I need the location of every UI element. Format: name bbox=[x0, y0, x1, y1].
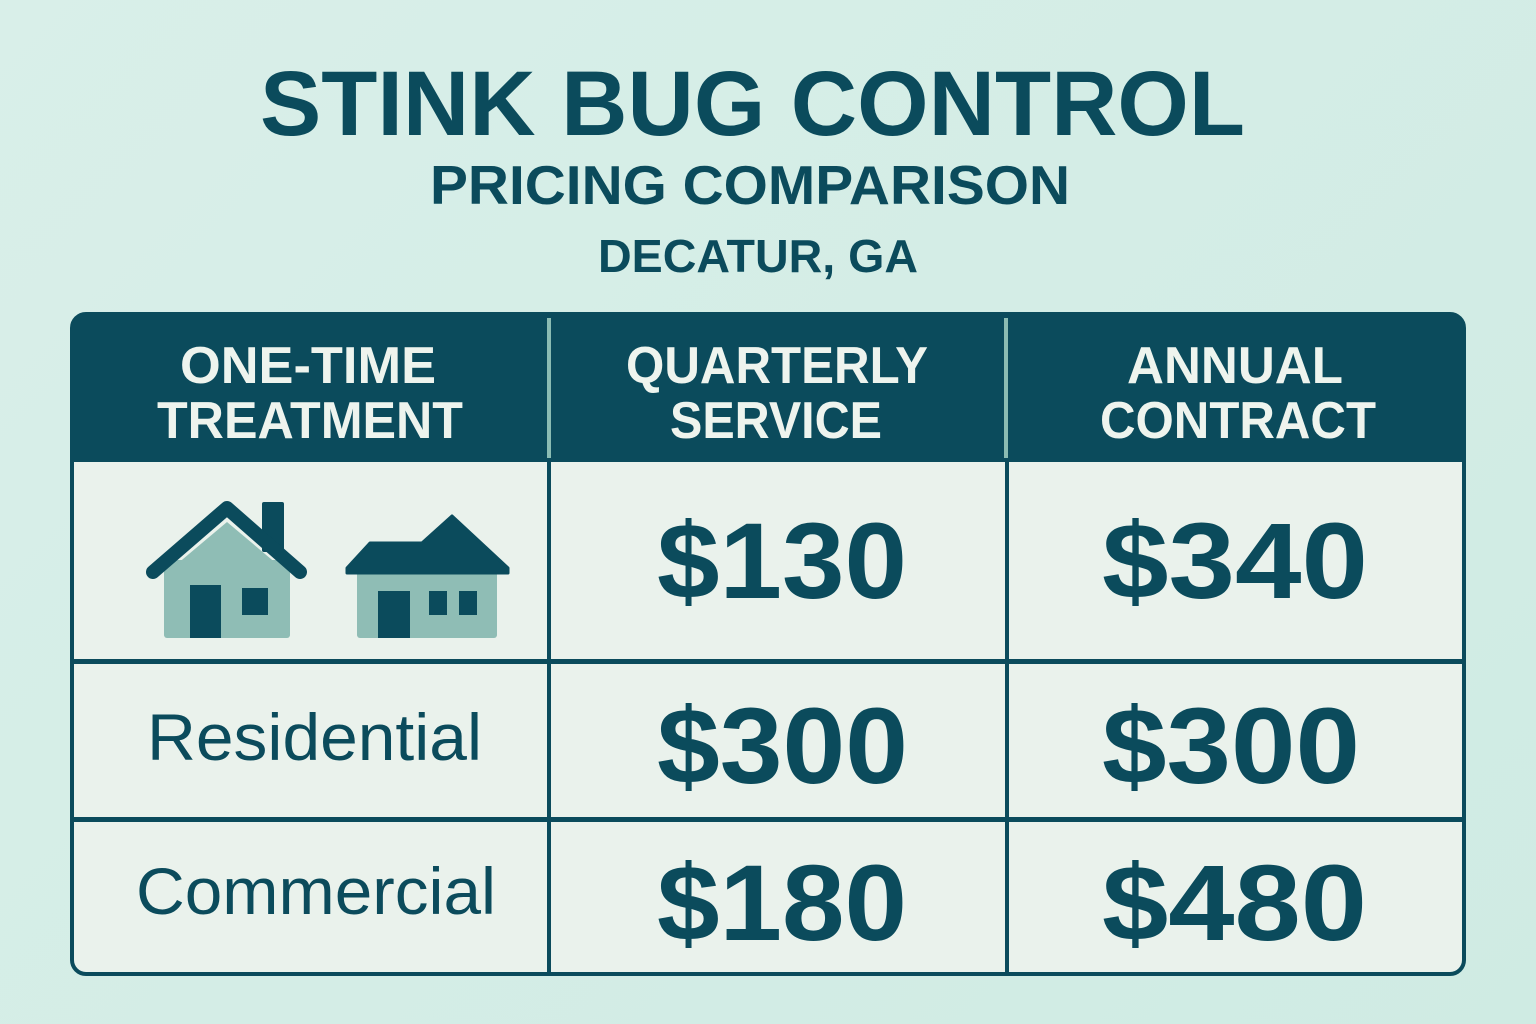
price: commercial annual: $480 bbox=[1102, 842, 1367, 963]
price: residential quarterly: $300 bbox=[657, 685, 908, 806]
title: STINK BUG CONTROL bbox=[260, 53, 1245, 155]
header: quarterly service: QUARTERLY bbox=[626, 337, 928, 395]
header: one-time treatment: TREATMENT bbox=[157, 392, 463, 450]
header: annual contract: ANNUAL bbox=[1127, 337, 1343, 395]
header: one-time treatment bbox=[157, 337, 463, 450]
price: annual row 1: $340 bbox=[1102, 500, 1368, 621]
pricing table bbox=[72, 314, 1464, 974]
price: quarterly row 1: $130 bbox=[657, 500, 907, 621]
label: residential: Residential bbox=[147, 700, 482, 774]
header: one-time treatment: ONE-TIME bbox=[180, 337, 436, 395]
subtitle: PRICING COMPARISON bbox=[430, 154, 1070, 216]
header bar bbox=[72, 314, 1464, 462]
price: commercial quarterly: $180 bbox=[657, 842, 907, 963]
header: annual contract bbox=[1100, 337, 1376, 450]
header: quarterly service: SERVICE bbox=[670, 392, 882, 450]
location: DECATUR, GA bbox=[598, 230, 918, 282]
label: commercial: Commercial bbox=[136, 854, 496, 928]
header: quarterly service bbox=[626, 337, 928, 450]
header: annual contract: CONTRACT bbox=[1100, 392, 1376, 450]
price: residential annual: $300 bbox=[1102, 685, 1360, 806]
icon: houses bbox=[153, 502, 508, 638]
